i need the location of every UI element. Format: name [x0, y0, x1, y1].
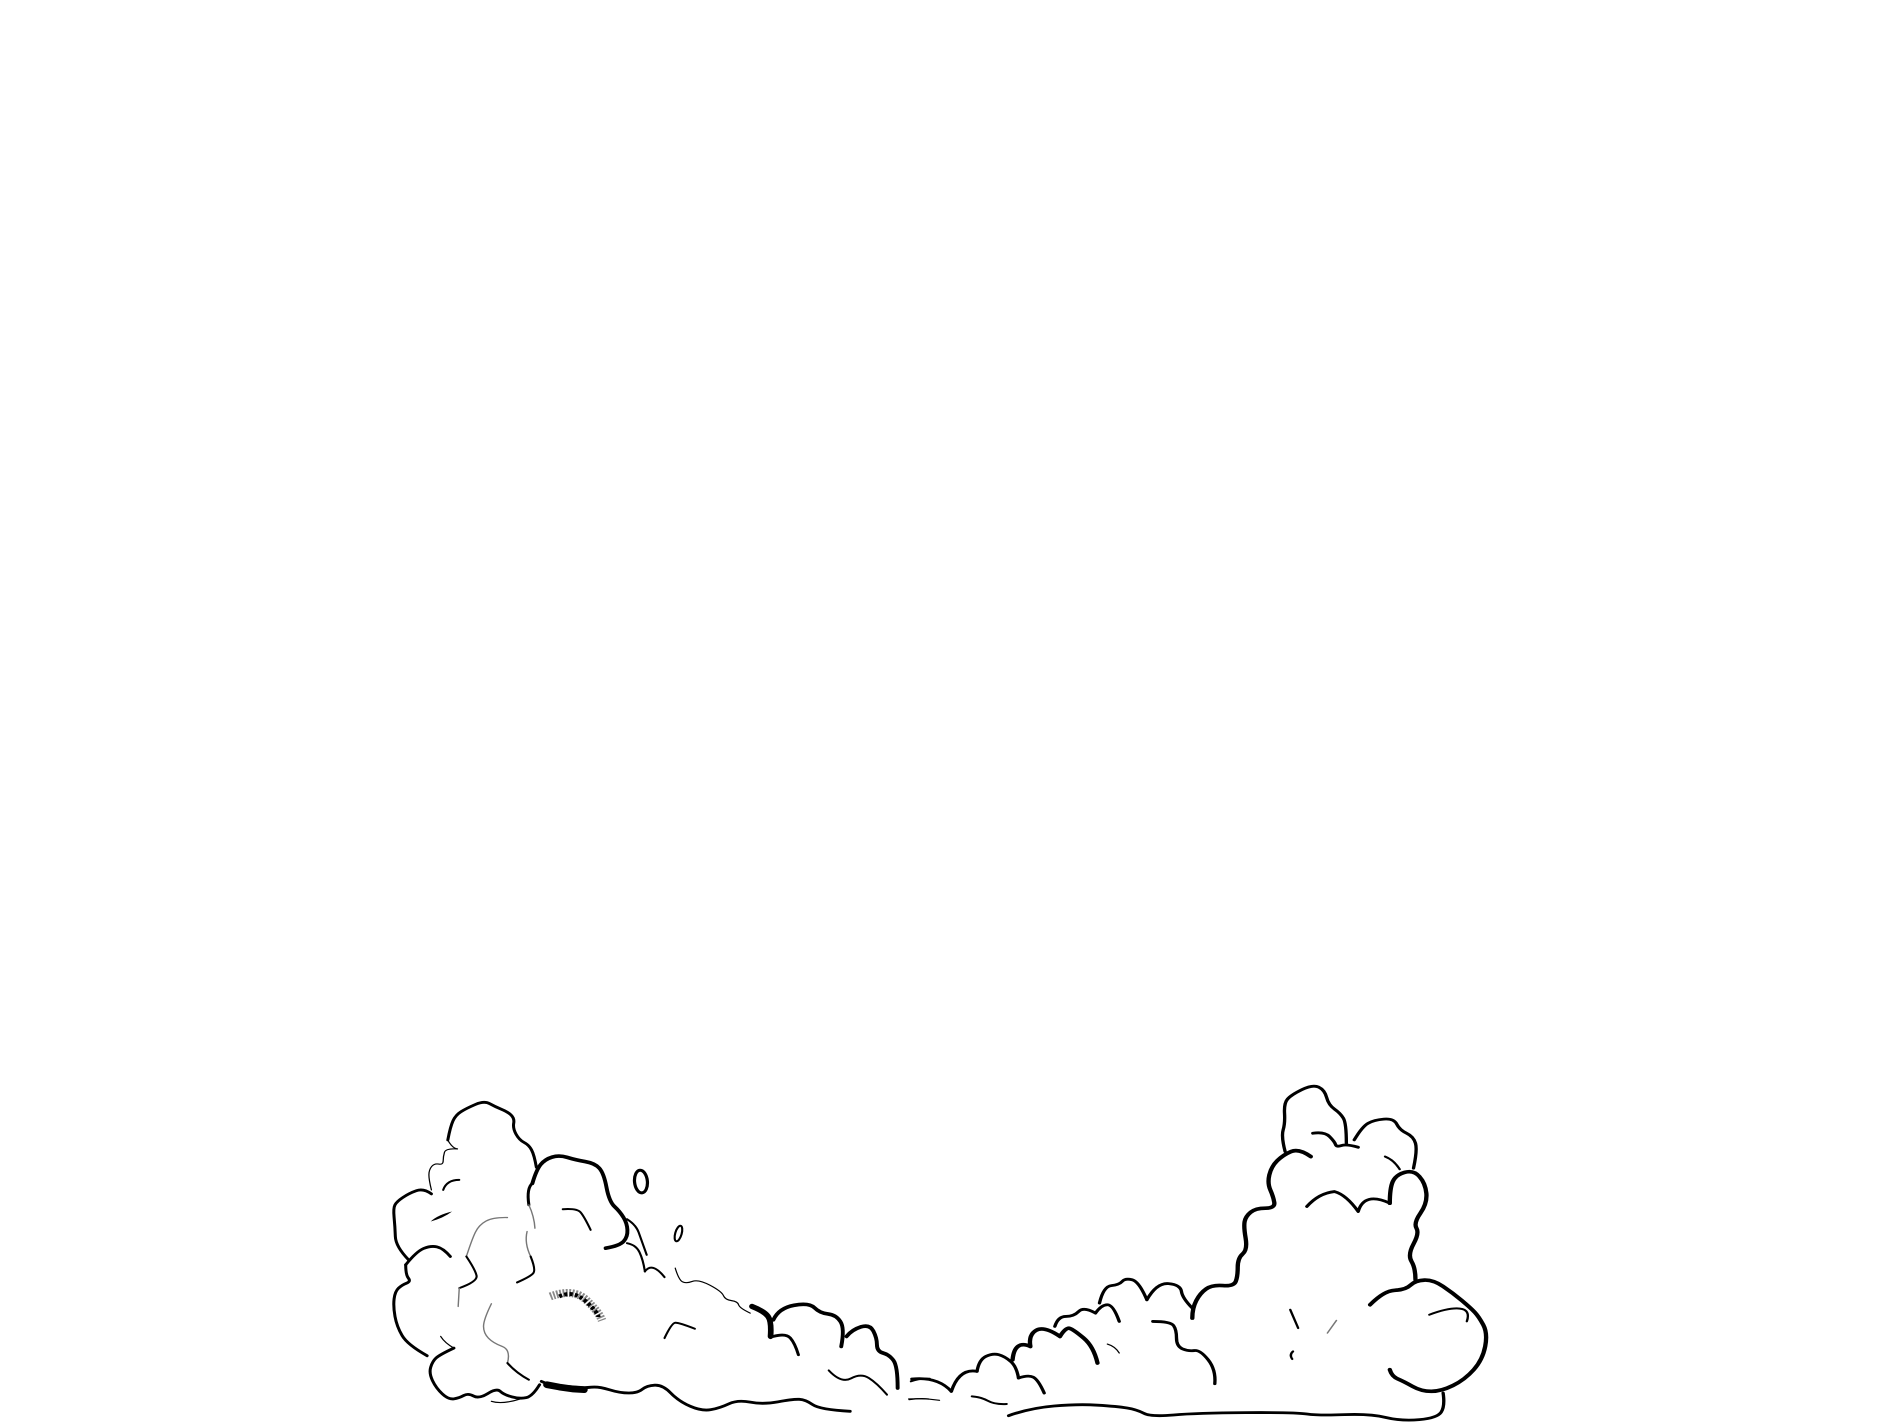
icon: dust droplet large [634, 1170, 648, 1193]
illustration: left dust cloud [394, 1102, 930, 1411]
mark: grey textured scribble [550, 1293, 602, 1320]
mark: dark scribble at cloud base [547, 1385, 584, 1390]
illustration: right dust cloud [909, 1086, 1486, 1420]
mark: short brush stroke [431, 1212, 452, 1222]
icon: dust droplet small [673, 1225, 684, 1242]
